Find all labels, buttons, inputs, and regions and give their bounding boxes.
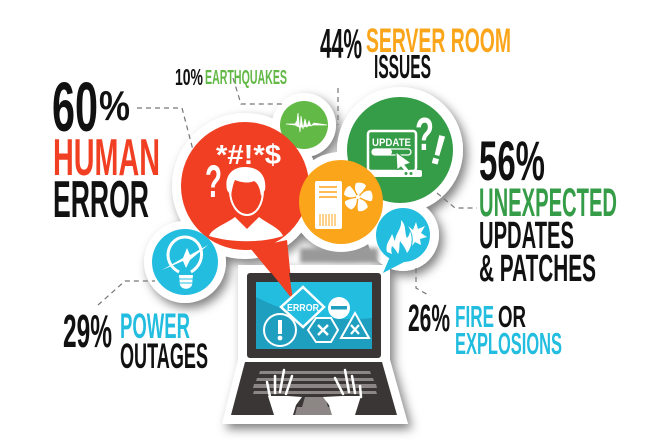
stat: 60% human error: 60 bbox=[52, 68, 98, 146]
icon: update laptop circle: UPDATE bbox=[372, 137, 411, 149]
stat: 10% earthquakes: EARTHQUAKES bbox=[205, 67, 287, 89]
icon: human error speech bubble bbox=[181, 122, 309, 300]
stat: 29% power outages bbox=[63, 305, 208, 376]
stat: 60% human error: HUMAN bbox=[53, 129, 160, 187]
stat: 26% fire or explosions: EXPLOSIONS bbox=[455, 326, 562, 361]
stat: 56% unexpected updates and patches: UPDATES bbox=[479, 215, 574, 257]
stat: 44% server room issues: ISSUES bbox=[374, 48, 431, 85]
stat: 26% fire or explosions bbox=[408, 298, 562, 361]
stat: 56% unexpected updates and patches: 56% bbox=[479, 129, 545, 192]
stat: 26% fire or explosions: 26% bbox=[408, 298, 450, 340]
stat: 10% earthquakes bbox=[175, 64, 287, 90]
stat: 29% power outages: OUTAGES bbox=[120, 337, 208, 376]
stat: 44% server room issues: 44% bbox=[320, 20, 362, 67]
dashed leader lines bbox=[98, 78, 477, 305]
stat: 44% server room issues: SERVER ROOM bbox=[366, 22, 511, 60]
error signs: ERROR bbox=[287, 303, 320, 314]
stat: 26% fire or explosions: OR bbox=[498, 299, 526, 334]
hands bbox=[267, 370, 361, 415]
stat: 60% human error bbox=[52, 68, 160, 229]
icon: fire speech bubble bbox=[376, 208, 430, 273]
stat: 60% human error: % bbox=[99, 82, 130, 129]
icon: server room fan circle bbox=[299, 160, 383, 244]
laptop with error screen bbox=[231, 265, 397, 415]
stat: 44% server room issues bbox=[320, 20, 511, 85]
icon: update laptop circle bbox=[347, 97, 453, 203]
icon: human error speech bubble: *#!*$ bbox=[216, 139, 281, 170]
icon: update laptop circle: ? bbox=[415, 108, 434, 160]
stat: 26% fire or explosions: FIRE bbox=[455, 299, 494, 334]
shadow pocket above laptop bbox=[300, 248, 378, 263]
error signs bbox=[264, 287, 369, 346]
icon: human error speech bubble: ? bbox=[205, 156, 222, 207]
stat: 29% power outages: POWER bbox=[120, 307, 190, 346]
icon: power outage light bulb bbox=[152, 229, 218, 295]
white sticker backing with shadow bbox=[144, 87, 463, 424]
white backing over the pocket bbox=[291, 152, 391, 275]
stat: 10% earthquakes: 10% bbox=[175, 64, 203, 90]
stat: 29% power outages: 29% bbox=[63, 305, 112, 357]
icon: earthquake seismograph circle bbox=[280, 101, 328, 149]
icon: update laptop circle: ! bbox=[426, 125, 451, 174]
stat: 60% human error: ERROR bbox=[53, 171, 149, 229]
stat: 56% unexpected updates and patches bbox=[479, 129, 617, 290]
